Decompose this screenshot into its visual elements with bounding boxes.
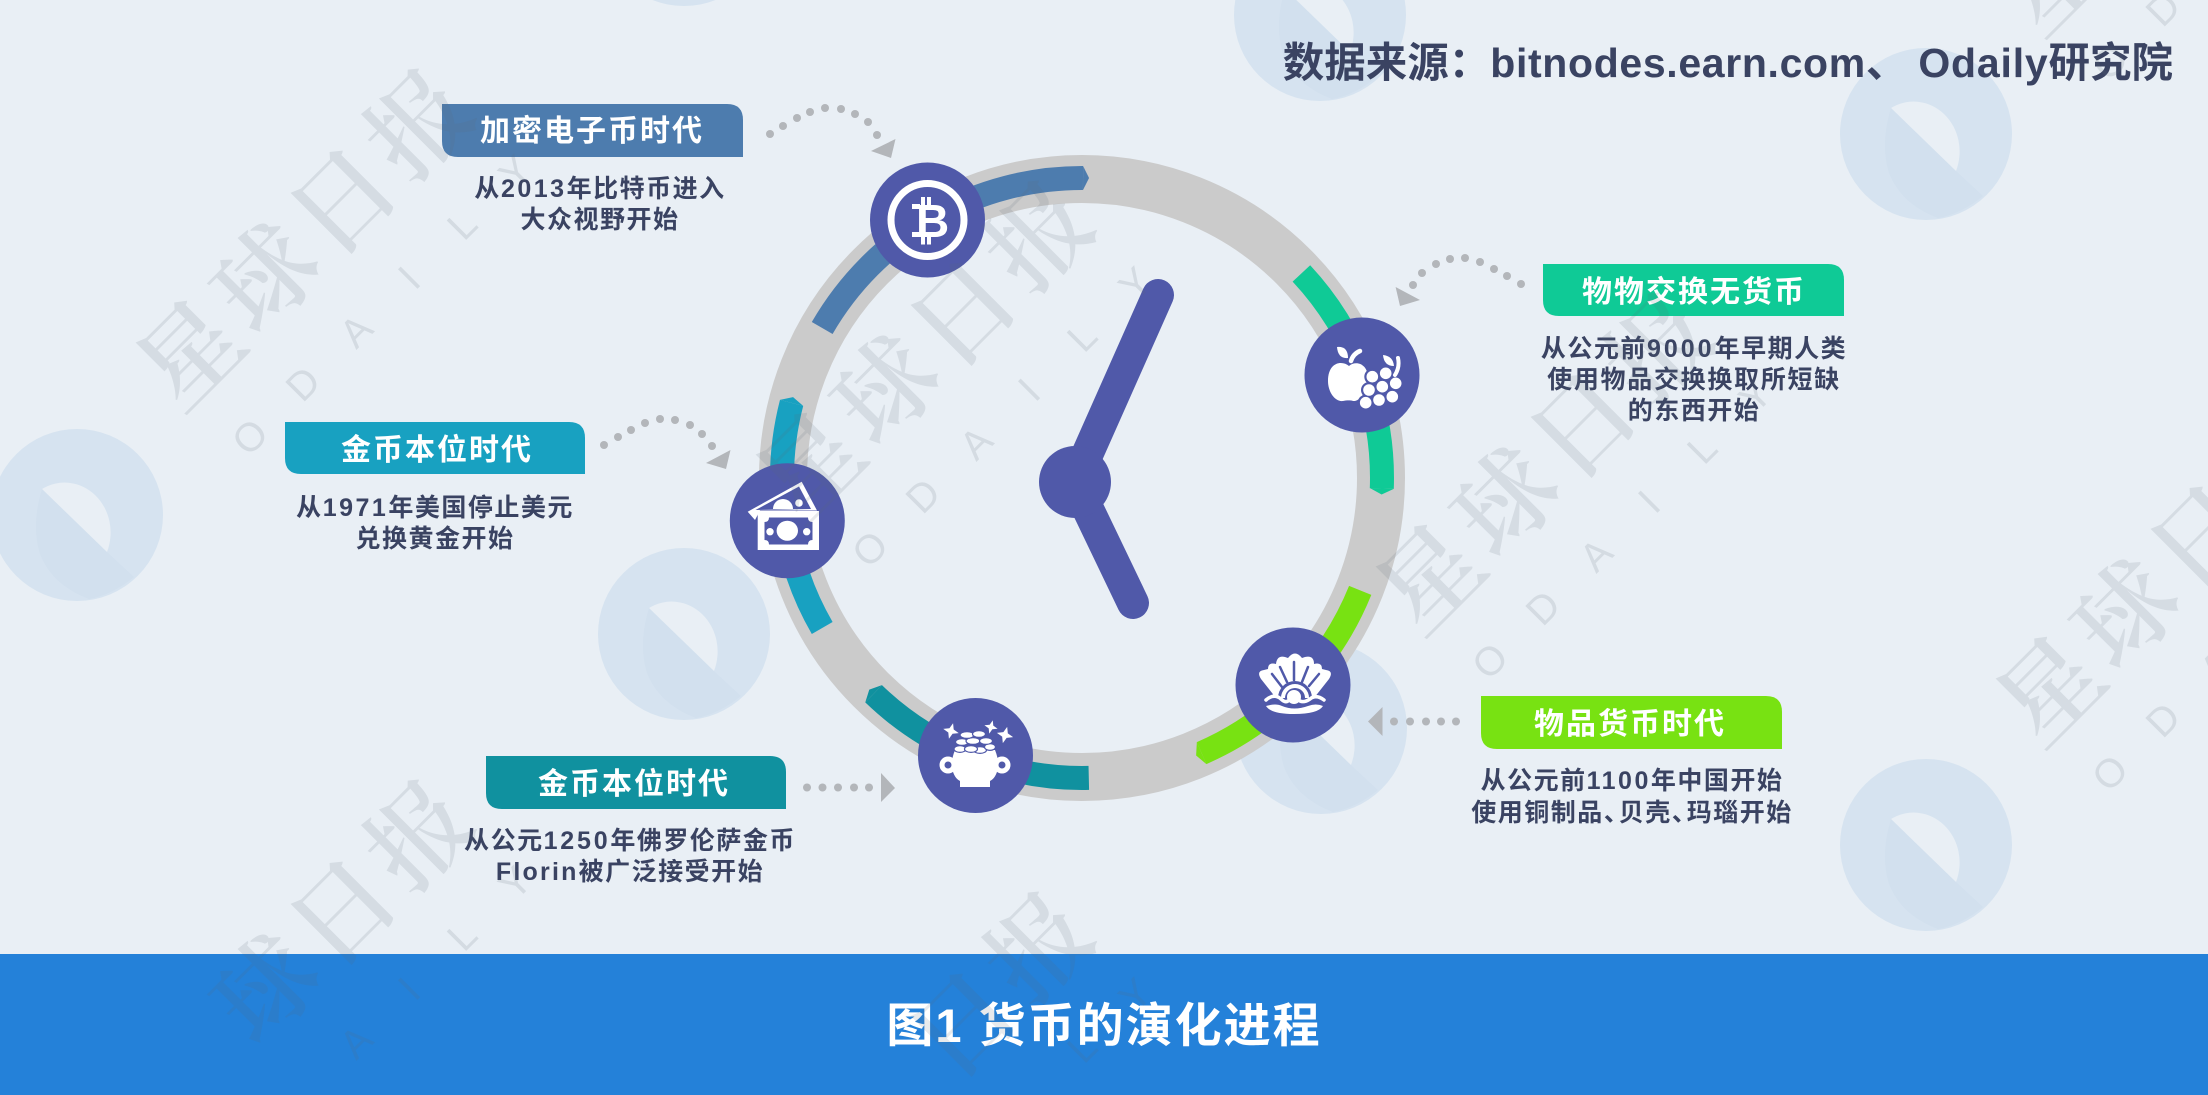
watermark text: AILY [332, 858, 541, 1067]
heading badge [285, 422, 585, 474]
watermark logos [0, 0, 2012, 931]
arc: gold florin era [861, 681, 1089, 778]
watermark text: 星球日报 [737, 158, 1121, 542]
arrow: florin label to icon [803, 773, 895, 802]
arrow: gold standard label to icon [600, 415, 730, 469]
grey ring [783, 179, 1381, 777]
icon: bitcoin [870, 162, 985, 278]
description: 从公元前1100年中国开始 [1481, 767, 1783, 795]
description: 从1971年美国停止美元 [296, 494, 574, 522]
heading: 金币本位时代 [538, 767, 730, 801]
watermark text: 球日报 [193, 757, 501, 1065]
heading: 物物交换无货币 [1582, 276, 1806, 309]
icon: shell [1236, 628, 1350, 742]
description: 使用铜制品、贝壳、玛瑙开始 [1471, 799, 1793, 827]
label: barter era [1541, 264, 1847, 425]
hub [1039, 446, 1111, 518]
clock hands [1039, 295, 1158, 603]
arc: crypto era [822, 166, 1089, 328]
arc: commodity money era [1191, 590, 1360, 767]
heading: 物品货币时代 [1534, 708, 1726, 741]
footer title: 图1 货币的演化进程 [886, 999, 1322, 1052]
label: commodity money era [1471, 696, 1793, 827]
label: gold standard era [285, 422, 585, 553]
icon: bitcoin: B [916, 195, 949, 247]
description: 使用物品交换换取所短缺 [1547, 366, 1841, 394]
description: Florin被广泛接受开始 [496, 858, 764, 886]
heading: 加密电子币时代 [480, 115, 704, 148]
long hand [1075, 295, 1158, 482]
description: 从公元1250年佛罗伦萨金币 [464, 827, 796, 855]
description: 从公元前9000年早期人类 [1541, 335, 1847, 363]
watermark text: ODAILY [844, 259, 1161, 576]
arc: gold standard era [780, 394, 822, 628]
heading badge [442, 104, 743, 157]
watermark text: 星球日报 [1357, 270, 1741, 654]
label: florin era [464, 756, 796, 886]
heading badge [1543, 264, 1844, 316]
arc: barter era [1301, 273, 1394, 495]
heading badge [1481, 696, 1782, 749]
watermark text: LY [1059, 970, 1161, 1072]
description: 大众视野开始 [520, 206, 680, 234]
label: crypto era [442, 104, 743, 234]
short hand [1075, 482, 1133, 603]
watermark text: ODAILY [224, 147, 541, 464]
watermark text: 日报 [890, 869, 1121, 1095]
clock ring [780, 166, 1394, 778]
icon: fruit [1304, 318, 1420, 432]
arrow: barter label to icon [1396, 254, 1525, 306]
description: 的东西开始 [1628, 397, 1760, 425]
data source: 数据来源：bitnodes.earn.com、Odaily研究院 [1283, 39, 2173, 86]
description: 兑换黄金开始 [355, 525, 515, 553]
heading: 金币本位时代 [341, 433, 533, 467]
description: 从2013年比特币进入 [474, 175, 726, 203]
watermark text: 星球日报 [117, 46, 501, 430]
arrow: commodity label to icon [1368, 707, 1460, 736]
footer band [0, 954, 2208, 1095]
icon: pot of gold [918, 698, 1033, 813]
icon: banknotes [730, 463, 845, 578]
watermark text: ODAILY [1464, 371, 1781, 688]
arrow: crypto label to icon [766, 104, 896, 158]
heading badge [486, 756, 786, 809]
